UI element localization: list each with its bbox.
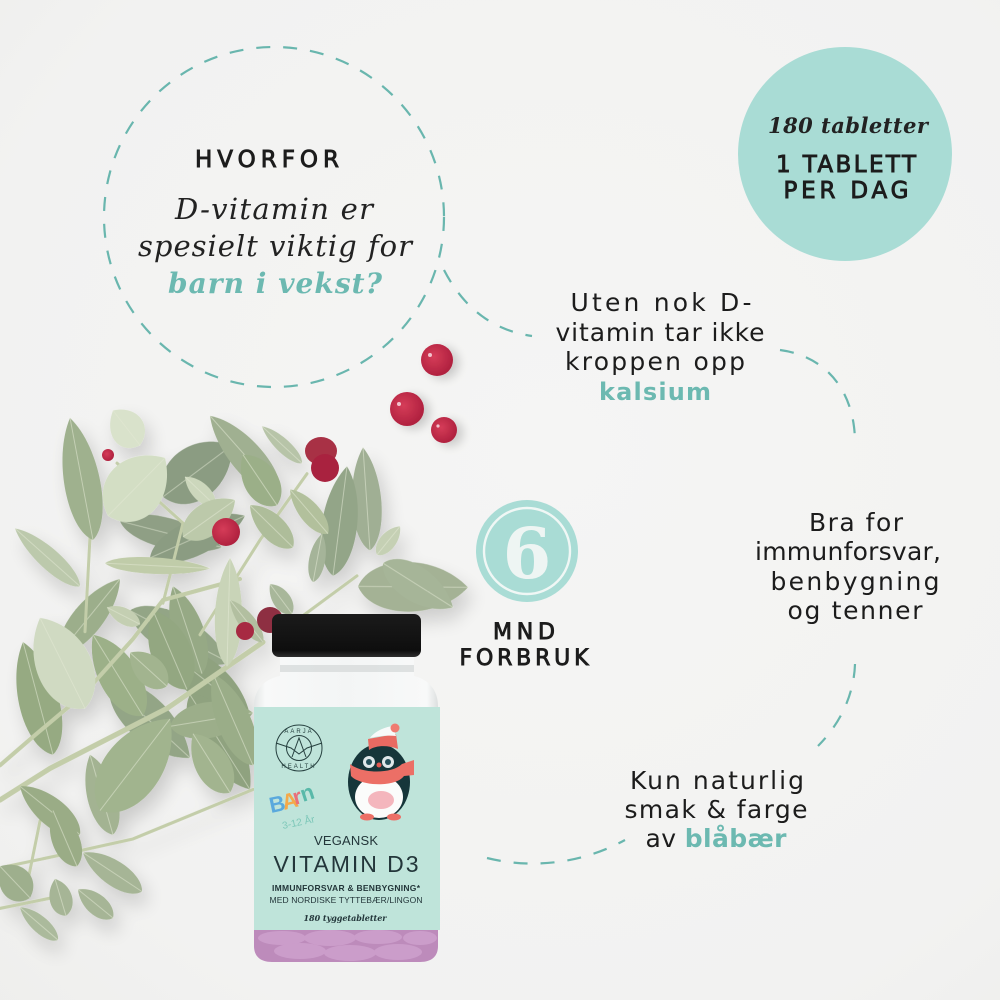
- text: kalsium: vitamin tar ikke: [556, 318, 764, 347]
- label: BARN: [267, 779, 317, 832]
- label: product text: IMMUNFORSVAR & BENBYGNING*: [272, 883, 421, 893]
- text: immunforsvar: Bra for: [809, 508, 904, 537]
- dashed connector 3: [818, 664, 855, 746]
- logo: Aarja Health: [276, 725, 322, 771]
- label: BARN: n: [297, 779, 317, 807]
- label: product text: MED NORDISKE TYTTEBÆR/LINGON: [270, 895, 422, 905]
- text: blabaer: Kun naturlig: [630, 766, 804, 795]
- text: immunforsvar: [755, 508, 941, 625]
- badge: dosage: 1 TABLETT: [776, 152, 917, 178]
- badge: 6 months: 6: [503, 512, 551, 595]
- heading question: spesielt viktig for: [138, 229, 414, 263]
- label: product text: [270, 833, 422, 923]
- bottle body: [254, 655, 438, 962]
- badge: dosage: PER DAG: [784, 178, 908, 204]
- logo: Aarja Health: AARJA: [284, 729, 314, 735]
- loose berries: [390, 344, 457, 443]
- dashed connector 1: [444, 270, 532, 336]
- bottle: [254, 614, 440, 962]
- label: mnd forbruk: MND: [493, 620, 555, 645]
- text: kalsium: kroppen opp: [565, 347, 745, 376]
- badge: dosage: 180 tabletter: [768, 113, 930, 138]
- label: BARN: B: [267, 790, 288, 818]
- text: immunforsvar: og tenner: [788, 596, 923, 625]
- text: kalsium: kalsium: [599, 378, 711, 406]
- text: blabaer: smak & farge: [624, 795, 808, 824]
- text: immunforsvar: immunforsvar,: [755, 537, 941, 566]
- text: kalsium: [556, 288, 764, 406]
- label: BARN: A: [279, 787, 301, 815]
- heading: hvorfor: HVORFOR: [195, 147, 339, 173]
- label: mnd forbruk: [460, 620, 589, 671]
- label: BARN: r: [289, 783, 305, 810]
- back leaves: [4, 424, 468, 839]
- text: kalsium: Uten nok D-: [570, 288, 752, 317]
- label: [254, 707, 440, 930]
- pills: [254, 930, 438, 962]
- berries on branch: [102, 437, 339, 640]
- dashed circle callout: [104, 47, 444, 387]
- dashed connector 2: [780, 350, 855, 446]
- text: blabaer: [624, 766, 808, 853]
- front leaves: [0, 399, 406, 946]
- heading: hvorfor: [138, 147, 414, 300]
- cap: [272, 614, 421, 657]
- logo: Aarja Health: HEALTH: [281, 764, 317, 770]
- label: product text: VITAMIN D3: [274, 851, 418, 877]
- heading question: [138, 192, 414, 300]
- dashed connector 4: [487, 840, 625, 864]
- illustration: lingonberry branches: [0, 399, 468, 946]
- label: mnd forbruk: FORBRUK: [460, 646, 589, 671]
- heading question: barn i vekst?: [168, 267, 383, 300]
- heading question: D-vitamin er: [174, 192, 375, 226]
- text: immunforsvar: benbygning: [770, 567, 940, 596]
- penguin: [348, 724, 414, 820]
- label: product text: VEGANSK: [314, 833, 378, 848]
- stems: [0, 463, 357, 908]
- label: BARN: 3-12 År: [281, 812, 316, 832]
- badge: dosage: [738, 47, 952, 261]
- badge: 6 months: [476, 500, 578, 602]
- text: blabaer: av blåbær: [646, 824, 787, 853]
- label: product text: 180 tyggetabletter: [304, 913, 387, 923]
